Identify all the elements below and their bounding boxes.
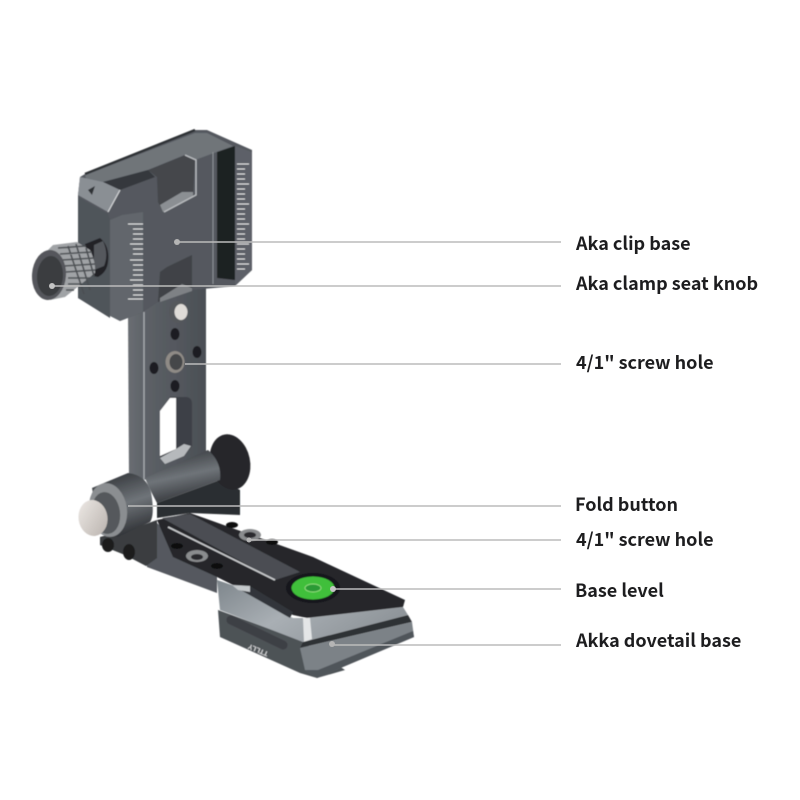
scale: left <box>128 224 143 299</box>
base plate <box>143 513 414 678</box>
green bubble level <box>286 573 340 603</box>
scale: right <box>237 164 249 269</box>
callout: lower 4/1" screw hole <box>246 526 714 552</box>
callout: Akka dovetail base: Akka dovetail base <box>575 627 741 653</box>
clamp left block <box>78 197 110 318</box>
callout: lower 4/1" screw hole: 4/1" screw hole <box>576 526 714 552</box>
fold button cap <box>76 498 110 538</box>
callout: Aka clip base <box>174 230 691 256</box>
base holes <box>171 522 278 569</box>
callout: Base level: Base level <box>575 577 664 603</box>
hinge bracket <box>157 480 240 518</box>
fold hinge <box>76 430 255 566</box>
fold knob <box>92 473 153 537</box>
dark recess <box>103 170 155 190</box>
callout: upper 4/1" screw hole: 4/1" screw hole <box>576 349 714 375</box>
base side rail <box>143 523 217 593</box>
light wedge <box>78 177 120 212</box>
hinge end cap <box>205 430 255 494</box>
base top dark surface <box>157 513 405 618</box>
slot in column <box>160 397 192 464</box>
mounting holes <box>150 328 202 392</box>
side screws bracket <box>100 520 157 566</box>
dovetail ridge <box>162 514 300 580</box>
base groove <box>300 615 412 648</box>
callout: Akka dovetail base <box>329 627 741 653</box>
locking screw <box>169 301 188 323</box>
clamp top band <box>85 133 233 193</box>
callout: Fold button: Fold button <box>575 491 678 517</box>
callout: Aka clamp seat knob <box>49 270 758 296</box>
clamp head <box>78 130 252 321</box>
product photo: folding L-bracket <box>30 130 414 678</box>
right jaw with scale <box>217 146 235 280</box>
lower cut-out <box>158 255 192 302</box>
hinge barrel <box>145 450 220 503</box>
callout: Aka clamp seat knob: Aka clamp seat knob <box>575 270 758 296</box>
brand mark: TTLLY <box>247 642 270 657</box>
vertical column plate <box>128 285 206 482</box>
upper cut-out <box>148 155 195 212</box>
base silver front <box>217 580 408 642</box>
clamp knob <box>30 238 108 301</box>
base wedge <box>300 622 414 678</box>
callout: Aka clip base: Aka clip base <box>575 230 691 256</box>
callout: Base level <box>330 577 664 603</box>
clamp silhouette <box>78 130 252 321</box>
base lower block <box>218 610 345 678</box>
